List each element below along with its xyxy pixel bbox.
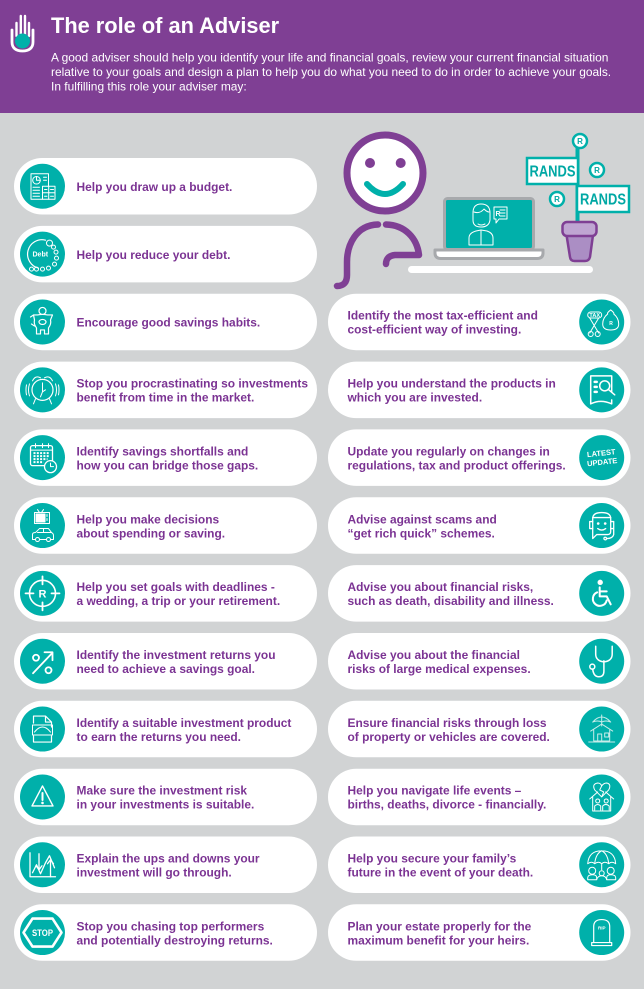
pill: investment risk: in your investments is suitable.	[76, 798, 254, 812]
pill: financial risks: Advise you about financial risks,	[348, 580, 533, 594]
pill: family's future: Help you secure your family’s	[348, 852, 517, 866]
icon: latest update: LATEST	[587, 447, 616, 459]
pill: estate: Plan your estate properly for the	[348, 919, 532, 933]
pill: regular updates: regulations, tax and product offerings.	[348, 458, 566, 472]
pill: savings habits: Encourage good savings habits.	[76, 316, 260, 330]
pill: savings shortfalls: how you can bridge those gaps.	[76, 458, 258, 472]
pill: tax efficient	[328, 294, 630, 350]
pill: understand products	[328, 362, 630, 418]
pill: procrastinating	[14, 362, 317, 418]
header banner	[0, 0, 644, 113]
pill: medical expenses: Advise you about the financial	[348, 648, 520, 662]
pill: savings habits	[14, 294, 317, 350]
sign: rands: RANDS	[580, 192, 626, 208]
pill: scams	[328, 497, 630, 554]
intro text: A good adviser should help you identify your life and financial goals, review your current financial situation	[51, 50, 608, 64]
pill: investment returns: Identify the investment returns you	[76, 648, 276, 662]
icon: market chart arrows	[30, 853, 56, 877]
pill: tax efficient: Identify the most tax-efficient and	[348, 309, 538, 323]
intro text: In fulfilling this role your adviser may:	[51, 80, 247, 94]
intro text	[51, 50, 611, 94]
icon: percentage arrow	[33, 652, 52, 673]
icon: magnifying glass on document	[591, 376, 615, 404]
pill: investment risk	[14, 769, 317, 825]
pill: budget	[14, 158, 317, 214]
icon: debt ball and chain: Debt	[32, 252, 49, 259]
pill: ups and downs	[14, 836, 317, 893]
icon: warning triangle	[32, 786, 53, 806]
icon: stop sign	[24, 919, 62, 947]
rand coins	[550, 134, 604, 206]
pill: procrastinating: benefit from time in the market.	[76, 391, 254, 405]
pill: goals	[14, 565, 317, 622]
pill: tax efficient: cost-efficient way of investing.	[348, 323, 521, 337]
pill: scams: Advise against scams and	[348, 512, 497, 526]
pill: goals: a wedding, a trip or your retirement.	[76, 594, 280, 608]
icon: gravestone	[592, 920, 612, 946]
pill: regular updates	[328, 429, 630, 486]
icon: wheelchair	[593, 580, 611, 606]
icon: calendar and clock	[30, 444, 56, 473]
pill: spending or saving: Help you make decisions	[76, 512, 219, 526]
pill: ups and downs: investment will go through.	[76, 866, 232, 880]
pill: investment product	[14, 701, 317, 757]
pill: life events	[328, 769, 630, 825]
pill: life events: births, deaths, divorce - financially.	[348, 798, 546, 812]
intro text: relative to your goals and design a plan to help you do what you need to do in order to achieve your goals.	[51, 65, 611, 79]
icon: latest update	[586, 447, 618, 468]
desk	[408, 266, 593, 273]
laptop	[435, 198, 543, 258]
icon: stop sign: STOP	[32, 928, 54, 939]
pill: property and vehicles: of property or vehicles are covered.	[348, 730, 550, 744]
icon: rand target	[26, 576, 60, 610]
icon: family under umbrella	[588, 851, 616, 880]
icon: tax scissors and money bag	[588, 310, 619, 336]
icon: rand target: R	[39, 588, 47, 600]
pill: estate: maximum benefit for your heirs.	[348, 933, 529, 947]
icon: house under umbrella	[589, 715, 615, 742]
title: The role of an Adviser	[51, 13, 280, 38]
pill: goals: Help you set goals with deadlines -	[76, 580, 275, 594]
pill: family's future	[328, 836, 630, 893]
pill: debt: Help you reduce your debt.	[76, 248, 230, 262]
pill: medical expenses	[328, 633, 630, 690]
icon: headset support chat	[590, 513, 614, 540]
pill: ups and downs: Explain the ups and downs your	[76, 852, 260, 866]
pill: debt	[14, 226, 317, 282]
pot	[562, 222, 596, 261]
pill: property and vehicles: Ensure financial risks through loss	[348, 716, 547, 730]
pill: estate	[328, 904, 630, 961]
pill: family's future: future in the event of your death.	[348, 866, 533, 880]
money plant	[527, 134, 629, 261]
icon: hand logo	[12, 16, 33, 51]
pill: savings shortfalls	[14, 429, 317, 486]
icon: gravestone: RIP	[598, 926, 605, 931]
laptop: R	[496, 211, 501, 218]
pill: property and vehicles	[328, 701, 630, 757]
icon: debt ball and chain	[28, 240, 58, 271]
pill: savings shortfalls: Identify savings shortfalls and	[76, 444, 248, 458]
pill: spending or saving	[14, 497, 317, 554]
pill: life events: Help you navigate life events –	[348, 784, 522, 798]
pill: understand products: Help you understand the products in	[348, 377, 556, 391]
rand coins: R	[554, 195, 560, 204]
pill: investment returns	[14, 633, 317, 690]
pill: investment product: Identify a suitable investment product	[76, 716, 291, 730]
pill: investment product: to earn the returns you need.	[76, 730, 241, 744]
icon: budget sheet and calculator	[31, 174, 55, 199]
icon: television and car	[32, 510, 54, 542]
icon: document	[32, 716, 52, 742]
pill: procrastinating: Stop you procrastinating so investments	[76, 377, 308, 391]
icon: piggy bank	[30, 307, 52, 334]
pill: investment returns: need to achieve a savings goal.	[76, 662, 255, 676]
icon: stethoscope	[590, 646, 612, 677]
illustration: adviser on laptop with money plant	[337, 134, 629, 286]
sign: rands: RANDS	[530, 164, 576, 180]
icon: alarm clock	[26, 377, 59, 404]
icon: tax scissors and money bag: TAX	[589, 313, 600, 319]
smiling person	[337, 135, 423, 286]
pill: medical expenses: risks of large medical expenses.	[348, 662, 531, 676]
pill: budget: Help you draw up a budget.	[76, 180, 232, 194]
rand coins: R	[594, 166, 600, 175]
pill: investment risk: Make sure the investment risk	[76, 784, 247, 798]
rand coins: R	[577, 137, 583, 146]
pill: financial risks: such as death, disability and illness.	[348, 594, 554, 608]
icon: house with broken heart and family	[590, 783, 614, 811]
pill: spending or saving: about spending or saving.	[76, 526, 225, 540]
pill: top performers: Stop you chasing top performers	[76, 919, 265, 933]
pill: financial risks	[328, 565, 630, 622]
pill: top performers: and potentially destroying returns.	[76, 933, 273, 947]
icon: tax scissors and money bag: R	[609, 321, 613, 327]
pill: understand products: which you are invested.	[346, 391, 482, 405]
pill: regular updates: Update you regularly on changes in	[348, 444, 550, 458]
pill: scams: “get rich quick” schemes.	[348, 526, 495, 540]
icon: latest update: UPDATE	[587, 456, 618, 468]
pill: top performers	[14, 904, 317, 961]
